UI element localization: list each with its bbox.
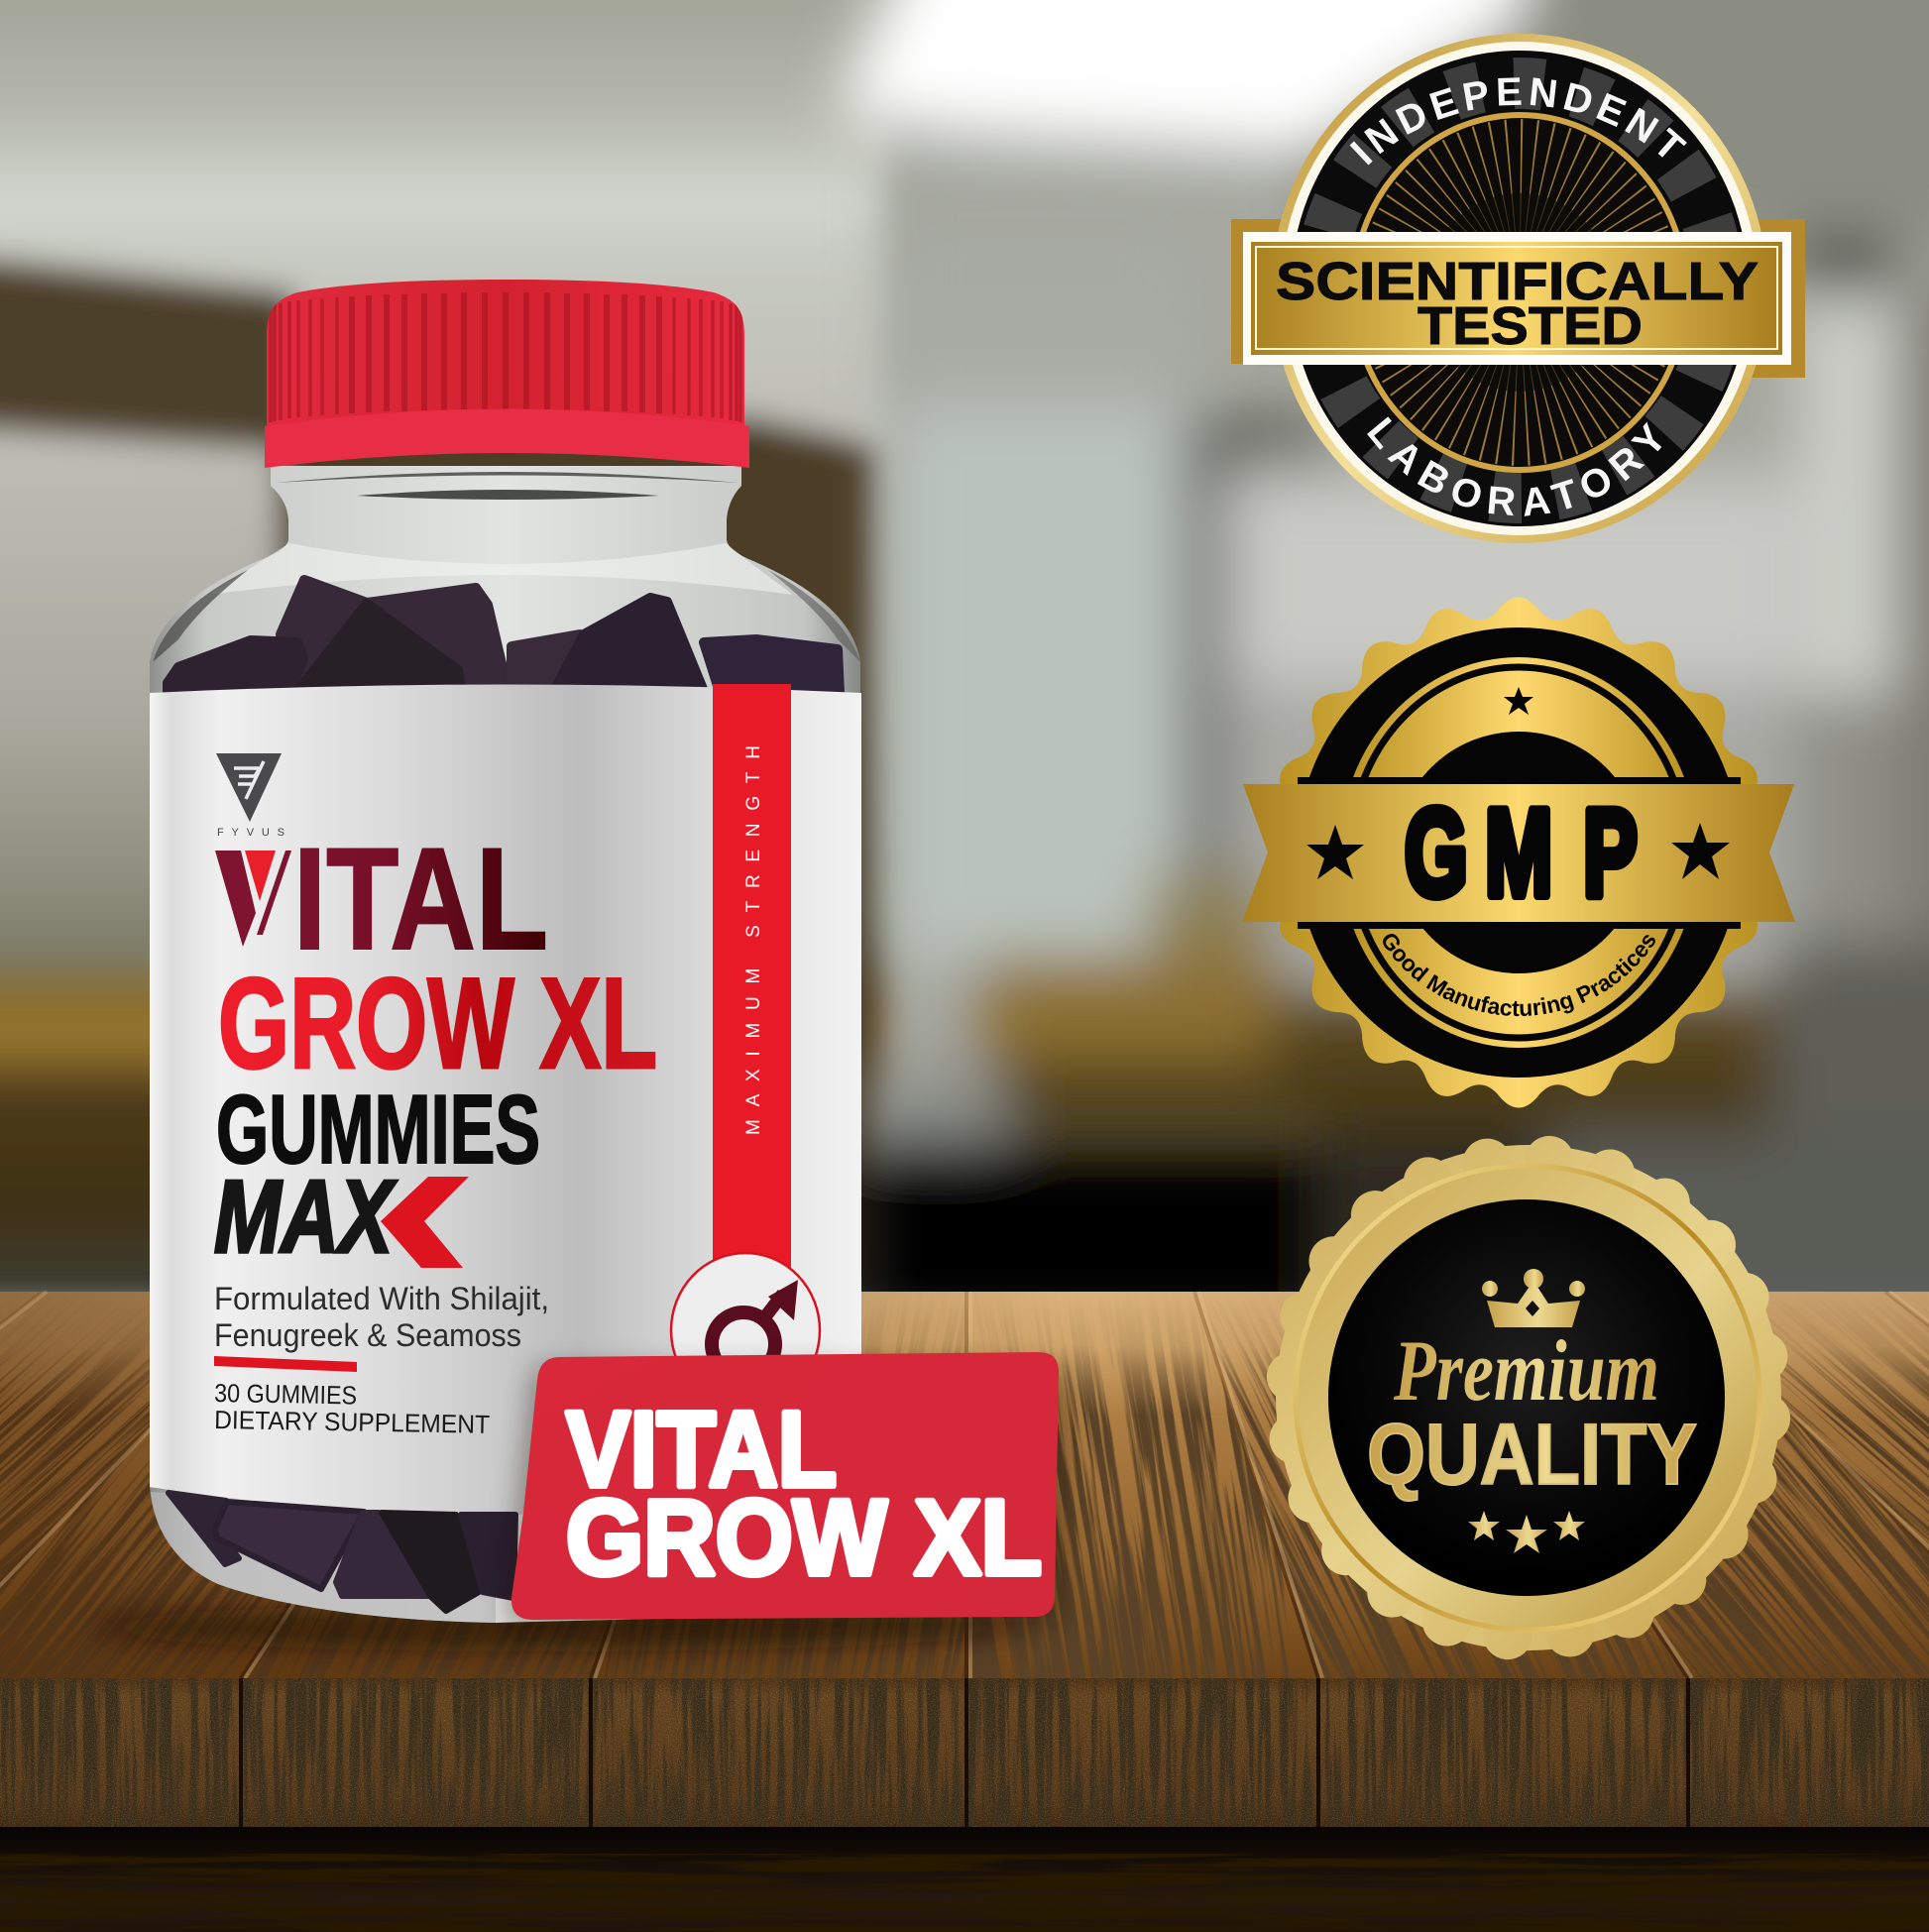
concentric rings: [1297, 627, 1741, 1078]
GMP text: GMP: [1405, 785, 1638, 922]
premium script text: Premium: [1393, 1323, 1659, 1420]
red stripe: [713, 684, 791, 1289]
ribbon: [1242, 784, 1795, 922]
brand logo: [216, 753, 284, 839]
crown: [1482, 1269, 1585, 1327]
formula text: [214, 1281, 549, 1353]
outer seal: [1272, 34, 1767, 543]
formula text: Fenugreek & Seamoss: [214, 1317, 521, 1353]
formula text: Formulated With Shilajit,: [214, 1281, 549, 1316]
wooden table top with planks: [0, 1292, 1929, 1678]
banner text line one: SCIENTIFICALLY: [1276, 252, 1759, 311]
GUMMIES title: GUMMIES: [216, 1075, 540, 1184]
supplement bottle: [150, 280, 861, 1623]
red product tag: [506, 1352, 1066, 1626]
brand logo: FYVUS: [217, 827, 284, 839]
banner: [1243, 232, 1791, 365]
star right: [1671, 823, 1730, 879]
star top: [1504, 687, 1533, 715]
shadow under bottle: [89, 1604, 1021, 1651]
red rule: [214, 1356, 357, 1372]
maximum strength text: MAXIMUM STRENGTH: [743, 745, 764, 1135]
dietary text: 30 GUMMIES: [214, 1378, 357, 1411]
scalloped gold seal: [1271, 1140, 1786, 1655]
scalloped seal: [1269, 597, 1768, 1108]
banner back: [1231, 219, 1805, 378]
badge: scientifically tested: [1231, 34, 1805, 543]
tag text VITAL: VITAL: [566, 1389, 837, 1509]
dietary text: DIETARY SUPPLEMENT: [214, 1405, 490, 1439]
dietary text: [214, 1378, 490, 1439]
blurred room background: right side: [843, 0, 1929, 1338]
curved text good manufacturing practices: Good Manufacturing Practices: [1376, 928, 1661, 1021]
rating stars: [1468, 1511, 1585, 1553]
star left: [1306, 825, 1364, 879]
glass jar: [150, 466, 861, 1623]
cap: [265, 280, 749, 468]
label: [150, 684, 861, 1611]
gummies top: [168, 580, 840, 694]
table front edge: [0, 1678, 1929, 1932]
quality text: QUALITY: [1367, 1407, 1697, 1503]
male symbol circle: [671, 1253, 820, 1408]
curved text independent: INDEPENDENT: [1350, 77, 1687, 165]
banner text line two: TESTED: [1418, 296, 1643, 356]
badge: GMP: [1242, 597, 1795, 1108]
MAX title: MAX: [214, 1160, 397, 1275]
GROW XL title: GROW XL: [218, 951, 657, 1095]
badge: premium quality: [1271, 1140, 1786, 1655]
gummies bottom: [169, 1493, 515, 1611]
curved text laboratory: LABORATORY: [1367, 416, 1661, 516]
tag text GROW XL: GROW XL: [566, 1477, 1042, 1597]
